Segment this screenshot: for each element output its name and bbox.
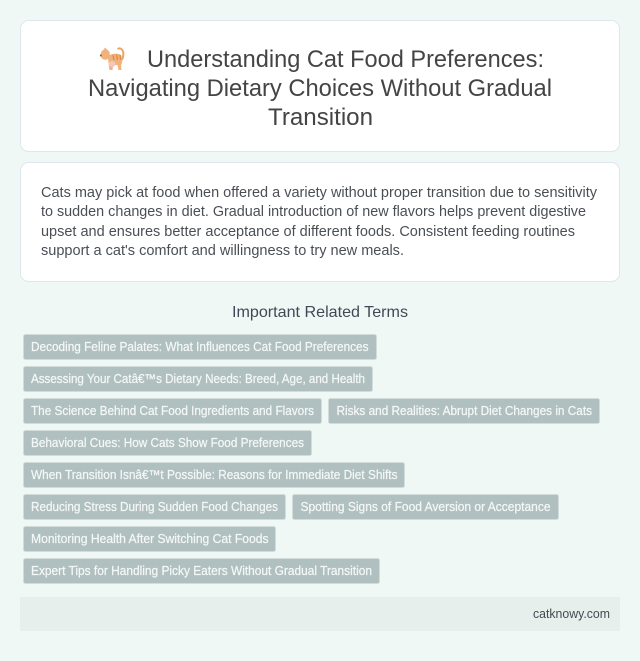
tag: expert tips: Expert Tips for Handling Picky Eaters Without Gradual Transition — [31, 564, 372, 578]
tag: when transition: When Transition Isnâ€™t Possible: Reasons for Immediate Diet Shifts — [31, 468, 398, 482]
panel: description — [20, 162, 620, 282]
tag: behavioral cues: Behavioral Cues: How Cats Show Food Preferences — [31, 436, 304, 450]
tag: monitoring health: Monitoring Health After Switching Cat Foods — [31, 532, 268, 546]
tag: decoding feline palates — [24, 334, 376, 360]
tag: dietary needs — [24, 366, 372, 392]
tag: science — [24, 398, 322, 424]
title text: Transition — [268, 104, 373, 131]
icon: cat — [100, 48, 123, 70]
tag: expert tips — [24, 558, 380, 584]
title text: Navigating Dietary Choices Without Gradual — [88, 75, 552, 102]
description text — [41, 184, 597, 259]
footer text: site name: catknowy.com — [533, 606, 610, 621]
tag: behavioral cues — [24, 430, 312, 456]
tag: decoding feline palates: Decoding Feline Palates: What Influences Cat Food Preferences — [31, 340, 368, 354]
panel: title — [20, 20, 620, 152]
description text: Cats may pick at food when offered a variety without proper transition due to sensitivity — [41, 184, 597, 201]
description text: upset and ensures better acceptance of different foods. Consistent feeding routines — [41, 223, 575, 240]
tag: spotting signs — [292, 494, 558, 520]
title text — [88, 46, 552, 131]
tag: spotting signs: Spotting Signs of Food Aversion or Acceptance — [300, 500, 551, 514]
tag list — [24, 334, 600, 584]
tag: reducing stress — [24, 494, 286, 520]
tag: science: The Science Behind Cat Food Ingredients and Flavors — [31, 404, 314, 418]
tag: risks — [328, 398, 600, 424]
title text: Understanding Cat Food Preferences: — [147, 46, 544, 73]
heading: important related terms: Important Related Terms — [232, 304, 408, 321]
tag: when transition — [24, 462, 404, 488]
description text: to sudden changes in diet. Gradual introduction of new flavors helps prevent digestive — [41, 203, 586, 220]
footer — [20, 597, 620, 631]
tag: dietary needs: Assessing Your Catâ€™s Dietary Needs: Breed, Age, and Health — [31, 372, 365, 386]
tag: reducing stress: Reducing Stress During Sudden Food Changes — [31, 500, 278, 514]
tag: monitoring health — [24, 526, 276, 552]
description text: support a cat's comfort and willingness to try new meals. — [41, 242, 404, 259]
tag: risks: Risks and Realities: Abrupt Diet Changes in Cats — [336, 404, 592, 418]
